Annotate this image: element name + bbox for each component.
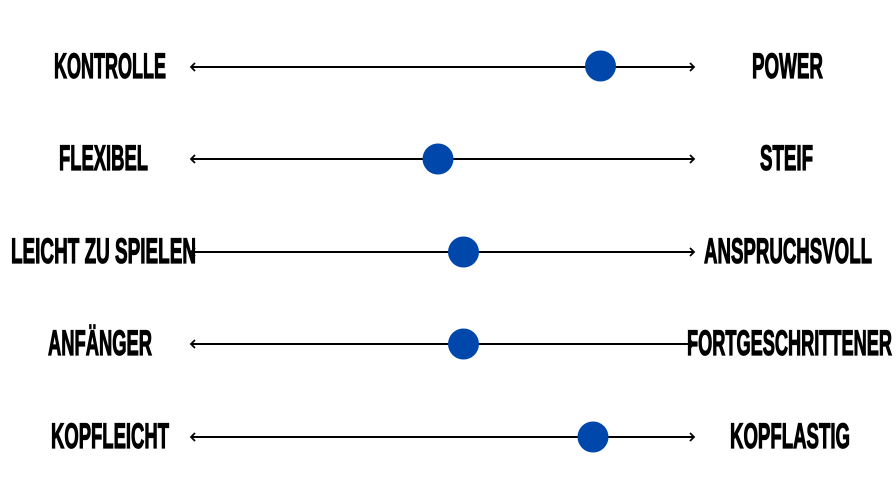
right label: POWER bbox=[752, 46, 823, 86]
left label: LEICHT ZU SPIELEN bbox=[11, 231, 196, 271]
slider dot bbox=[448, 328, 479, 360]
slider dot bbox=[422, 144, 454, 174]
row: Anfänger to Fortgeschrittener bbox=[48, 323, 892, 363]
double arrow bbox=[191, 433, 694, 441]
left label: KOPFLEICHT bbox=[51, 416, 169, 456]
row: Leicht zu spielen to Anspruchsvoll bbox=[11, 231, 872, 271]
double arrow bbox=[191, 248, 694, 256]
row: Kopfleicht to Kopflastig bbox=[51, 416, 850, 456]
slider dot bbox=[578, 422, 608, 452]
row: Flexibel to Steif bbox=[59, 138, 813, 178]
left label: ANFÄNGER bbox=[48, 323, 152, 363]
right label: STEIF bbox=[760, 138, 813, 178]
row: Kontrolle to Power bbox=[54, 46, 823, 86]
slider dot bbox=[448, 236, 479, 268]
slider dot bbox=[585, 50, 616, 82]
double arrow bbox=[191, 155, 694, 163]
left label: FLEXIBEL bbox=[59, 138, 148, 178]
double arrow bbox=[191, 63, 694, 71]
double arrow bbox=[191, 340, 694, 348]
left label: KONTROLLE bbox=[54, 46, 166, 86]
